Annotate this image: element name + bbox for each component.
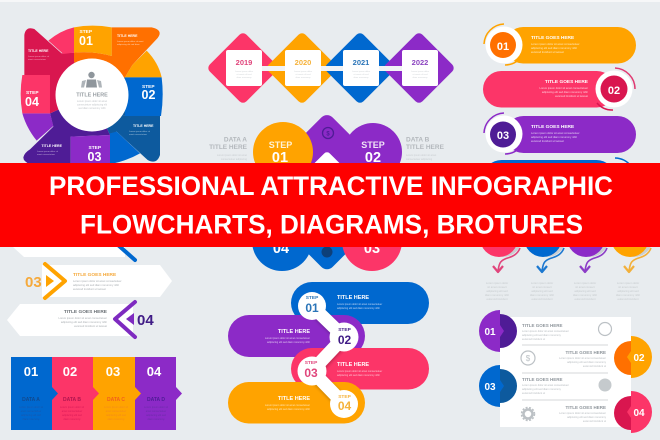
- icon: people: [81, 72, 102, 88]
- column: data b: diam nonummy: [63, 418, 81, 421]
- orange title text: TITLE HERE: [117, 34, 138, 38]
- pill: step 03: Lorem ipsum dolor sit amet consectetuer: [337, 370, 382, 373]
- card: 2019: [226, 50, 262, 86]
- list row 03: Lorem ipsum dolor sit amet consectetuer: [522, 383, 569, 387]
- blue title text: amet consectetuer: [129, 133, 147, 136]
- arrow row: 03: 03: [25, 274, 42, 291]
- captions: Lorem ipsum dolor: [574, 281, 596, 285]
- pill: step 01: adipiscing elit sed diam nonummy nibh: [337, 307, 381, 310]
- list row 04: euismod tincidunt ut: [583, 419, 606, 423]
- pill: step 04: adipiscing elit sed diam nonummy nibh: [267, 408, 311, 411]
- blue title text: Lorem ipsum dolor sit: [129, 130, 150, 133]
- pill: 02: 02: [608, 85, 620, 97]
- pill: 03: adipiscing elit sed diam nonummy nibh: [531, 135, 578, 139]
- arrow row: 03: euismod tincidunt ut laoreet: [73, 287, 106, 291]
- diamond: 2020: [265, 31, 339, 105]
- badge: 03: [479, 365, 517, 407]
- pill: step 03: [291, 348, 429, 390]
- banner: [0, 163, 660, 247]
- column: data d: DATA D: [147, 397, 165, 403]
- pill: 01: TITLE GOES HERE: [531, 35, 575, 41]
- data b label: DATA B: [406, 136, 430, 144]
- step 01 label: 01: [79, 34, 93, 48]
- badge: 04: [614, 391, 652, 433]
- pill: 01: euismod tincidunt ut laoreet: [531, 50, 564, 54]
- card: 2019: 2019: [236, 58, 252, 67]
- captions: [485, 281, 641, 301]
- pill: 01: Lorem ipsum dolor sit amet consectetuer: [531, 42, 580, 46]
- arrow row: 03: [25, 264, 172, 298]
- pill: 03: 03: [497, 130, 509, 142]
- badge: 04: 04: [633, 408, 645, 419]
- card: 2022: [402, 50, 438, 86]
- captions: Lorem ipsum dolor: [617, 281, 639, 285]
- captions: euismod tincidunt: [487, 297, 508, 301]
- white card: [500, 317, 631, 427]
- diamond: 2022: [382, 31, 456, 105]
- circle: step 02: 02: [365, 150, 381, 166]
- pill: step 04: TITLE HERE: [278, 396, 310, 402]
- list row 04: TITLE GOES HERE: [565, 405, 606, 410]
- card: 2022: diam nonummy: [413, 77, 428, 79]
- crimson title text: Lorem ipsum dolor sit: [28, 55, 49, 58]
- blue title text: [129, 124, 154, 136]
- column: data b: 02: [63, 364, 77, 379]
- step 02 label: 02: [142, 88, 155, 102]
- banner headline line 1: PROFESSIONAL ATTRACTIVE INFOGRAPHIC: [49, 171, 613, 201]
- badge: 01: [479, 310, 517, 352]
- pill: step 01: Lorem ipsum dolor sit amet consectetuer: [337, 303, 382, 306]
- connector snake with step numbers: [298, 292, 358, 418]
- pill: 01: [484, 24, 636, 65]
- captions: adipiscing elit sed: [617, 289, 639, 293]
- panel: chevron arrows: [7, 245, 172, 337]
- card: 2021: Lorem ipsum dolor: [352, 70, 370, 73]
- purple title text: [37, 144, 63, 156]
- connector bar: [255, 66, 405, 71]
- captions: diam nonummy nibh: [573, 293, 598, 297]
- data a label: Lorem ipsum dolor sit amet: [217, 154, 247, 157]
- purple title text: amet consectetuer: [37, 153, 55, 156]
- captions: adipiscing elit sed: [486, 289, 508, 293]
- badge: 01: 01: [484, 327, 496, 338]
- circle: step 03: 03: [364, 241, 380, 257]
- connector snake with step numbers: STEP: [305, 360, 318, 366]
- captions: Lorem ipsum dolor: [486, 281, 508, 285]
- circle: step 01: STEP: [269, 140, 292, 150]
- icon: coin: [322, 128, 334, 138]
- center circle: consectetuer adipiscing elit: [77, 104, 107, 106]
- pill: 02: euismod tincidunt ut laoreet: [555, 94, 588, 98]
- column: data a: DATA A: [22, 397, 40, 403]
- column: data b: amet consectetuer: [62, 410, 82, 413]
- badge: 02: 02: [633, 353, 645, 364]
- card: 2022: 2022: [412, 58, 428, 67]
- panel: circles with arrows: [480, 219, 653, 301]
- circle: step 01: 01: [272, 150, 288, 166]
- step 02 label: STEP: [142, 84, 155, 90]
- connector snake with step numbers: 03: [304, 366, 318, 380]
- captions: diam nonummy nibh: [616, 293, 641, 297]
- captions: sit amet consect: [532, 285, 552, 289]
- card: 2020: Lorem ipsum dolor: [294, 70, 312, 73]
- arrow row: 04: adipiscing elit sed diam nonummy nibh: [61, 320, 107, 324]
- list row 01: Lorem ipsum dolor sit amet consectetuer: [522, 329, 569, 333]
- list row 04: [522, 405, 607, 423]
- connector snake with step numbers: 04: [338, 399, 351, 413]
- captions: euismod tincidunt: [532, 297, 553, 301]
- arrow row: 04: euismod tincidunt ut laoreet: [74, 324, 107, 328]
- crimson title text: amet consectetuer: [28, 58, 46, 61]
- captions: euismod tincidunt: [575, 297, 596, 301]
- column: data a: adipiscing elit sed: [21, 414, 41, 417]
- column: data a: Lorem ipsum dolor sit: [19, 406, 43, 409]
- pill: step 04: [228, 382, 365, 424]
- diamond: purple: [289, 112, 365, 188]
- crimson title text: [28, 49, 49, 61]
- panel: data columns: [11, 357, 182, 430]
- step 01 label: STEP: [80, 29, 93, 35]
- card: 2020: sit amet elit sed: [295, 73, 311, 76]
- connector snake with step numbers: 01: [305, 301, 319, 315]
- center circle: [56, 58, 128, 132]
- banner headline line 2: FLOWCHARTS, DIAGRAMS, BROTURES: [80, 210, 583, 240]
- panel: timeline diamonds: [206, 31, 456, 105]
- list row 01: euismod tincidunt ut: [522, 337, 545, 341]
- captions: adipiscing elit sed: [531, 289, 553, 293]
- card: 2020: 2020: [295, 58, 311, 67]
- arrow row: top, blue: [13, 245, 135, 260]
- list row 02: $: [526, 354, 531, 363]
- captions: adipiscing elit sed: [574, 289, 596, 293]
- card: 2022: sit amet elit sed: [412, 73, 428, 76]
- list row 01: [522, 322, 612, 346]
- list row 02: TITLE GOES HERE: [565, 350, 606, 355]
- data a label: consectetuer adipiscing: [221, 158, 248, 161]
- pill: 02: TITLE GOES HERE: [545, 79, 589, 85]
- data b label: TITLE HERE: [406, 144, 445, 151]
- column: data d: amet consectetuer: [146, 410, 166, 413]
- pill: 02: adipiscing elit sed diam nonummy nibh: [542, 90, 588, 94]
- step 03 label: 03: [88, 150, 101, 164]
- list row 02: adipiscing elit sed diam nonummy: [567, 360, 607, 364]
- pill: 02: Lorem ipsum dolor sit amet consectetuer: [539, 86, 588, 90]
- captions: sit amet consect: [575, 285, 595, 289]
- pill: 02: [483, 68, 635, 110]
- pill: 03: [484, 113, 636, 154]
- arrow row: 04: Lorem ipsum dolor sit amet consectetuer: [58, 316, 107, 320]
- list row 04: adipiscing elit sed diam nonummy: [567, 415, 607, 419]
- crimson title text: TITLE HERE: [28, 49, 49, 53]
- column: data c: amet consectetuer: [106, 410, 126, 413]
- badge: 03: 03: [484, 382, 496, 393]
- data a label: DATA A: [224, 136, 247, 144]
- list row 02: Lorem ipsum dolor sit amet consectetuer: [559, 356, 606, 360]
- data b label: Lorem ipsum dolor sit amet: [406, 154, 436, 157]
- pill: 01: 01: [497, 41, 509, 53]
- connector snake with step numbers: 02: [338, 333, 351, 347]
- diagram segments: [21, 26, 163, 164]
- list row 02: euismod tincidunt ut: [583, 364, 606, 368]
- list row 03: TITLE GOES HERE: [522, 377, 563, 382]
- white center diamond: [309, 151, 345, 187]
- arrow row: 04: [7, 302, 154, 337]
- captions: Lorem ipsum dolor: [531, 281, 553, 285]
- card: 2019: sit amet elit sed: [236, 73, 252, 76]
- list row 01: TITLE GOES HERE: [522, 323, 563, 328]
- purple title text: TITLE HERE: [42, 144, 63, 148]
- pill: step 03: TITLE HERE: [337, 362, 369, 368]
- arrow row: 03: Lorem ipsum dolor sit amet consectetuer: [73, 279, 122, 283]
- item: orange arrow: [611, 219, 653, 272]
- orange title text: adipiscing elit sed diam: [117, 43, 140, 46]
- connector snake with step numbers: STEP: [306, 295, 319, 301]
- circle: step 04: [252, 211, 312, 271]
- arrow row: 03: adipiscing elit sed diam nonummy nibh: [73, 283, 120, 287]
- step 04 label: 04: [25, 95, 39, 109]
- column: data c: Lorem ipsum dolor sit: [104, 406, 128, 409]
- captions: sit amet consect: [618, 285, 638, 289]
- column: data c: 03: [106, 364, 120, 379]
- column: data c: diam nonummy: [107, 418, 125, 421]
- card: 2021: sit amet elit sed: [353, 73, 369, 76]
- column: data d: diam nonummy: [147, 418, 165, 421]
- circle: step 04: 04: [273, 241, 289, 257]
- card: 2022: Lorem ipsum dolor: [411, 70, 429, 73]
- pill: 03: Lorem ipsum dolor sit amet consectetuer: [531, 131, 580, 135]
- blue title text: TITLE HERE: [133, 124, 154, 128]
- circle: step 03: [342, 211, 402, 271]
- circle: step 02: [344, 123, 402, 181]
- arrow row: 04: TITLE GOES HERE: [64, 309, 108, 315]
- column: data d: Lorem ipsum dolor sit: [144, 406, 168, 409]
- list row 02: [521, 350, 608, 374]
- card: 2021: diam nonummy: [354, 77, 369, 79]
- column: data c: [93, 357, 141, 430]
- column: data c: adipiscing elit sed: [106, 414, 126, 417]
- column: data b: Lorem ipsum dolor sit: [60, 406, 84, 409]
- column: data a: diam nonummy: [22, 418, 40, 421]
- diamond: blue: [294, 207, 360, 273]
- column: data d: adipiscing elit sed: [146, 414, 166, 417]
- pill: step 01: [291, 282, 429, 324]
- panel: snake step pills: [228, 282, 429, 424]
- list row 04: Lorem ipsum dolor sit amet consectetuer: [559, 411, 606, 415]
- connector snake with step numbers: STEP: [338, 327, 352, 333]
- diamond: 2021: [323, 31, 397, 105]
- column: data b: DATA B: [63, 397, 81, 403]
- circle: step 01: [253, 122, 313, 182]
- pill: step 03: adipiscing elit sed diam nonummy nibh: [337, 374, 381, 377]
- data a label: TITLE HERE: [209, 144, 248, 151]
- orange title text: [117, 34, 144, 46]
- panel: four step circles: [209, 112, 445, 273]
- pill: step 01: TITLE HERE: [337, 295, 369, 301]
- center circle: TITLE HERE: [76, 92, 108, 98]
- panel: white list with side badges: [479, 310, 652, 433]
- list row 03: euismod tincidunt ut: [522, 391, 545, 395]
- column: data c: DATA C: [107, 397, 125, 403]
- pill: step 02: [228, 315, 365, 357]
- card: 2019: Lorem ipsum dolor: [235, 70, 253, 73]
- column: data d: [135, 357, 182, 430]
- center circle: Lorem ipsum dolor sit amet: [77, 100, 107, 103]
- captions: diam nonummy nibh: [530, 293, 555, 297]
- badge: 02: [614, 336, 652, 378]
- pill: step 02: adipiscing elit sed diam nonummy nibh: [267, 341, 311, 344]
- list row 03: adipiscing elit sed diam nonummy: [522, 387, 562, 391]
- column: data b: [52, 357, 99, 430]
- column: data a: [11, 357, 58, 430]
- list row 03: [522, 377, 612, 400]
- card: 2020: diam nonummy: [296, 77, 311, 79]
- center circle: sed diam nonummy nibh: [78, 107, 106, 110]
- icon: coin: $: [326, 132, 330, 138]
- pill: step 04: Lorem ipsum dolor sit amet consectetuer: [265, 404, 310, 407]
- icon: dark dot: [322, 246, 332, 258]
- orange title text: Lorem ipsum dolor sit amet: [117, 40, 144, 43]
- purple title text: Lorem ipsum dolor sit: [37, 150, 58, 153]
- item: pink arrow: [480, 219, 522, 272]
- card: 2019: diam nonummy: [237, 77, 252, 79]
- data b label: [406, 136, 445, 161]
- card: 2021: 2021: [353, 58, 369, 67]
- connector snake with step numbers: STEP: [338, 394, 352, 400]
- step 03 label: STEP: [88, 145, 102, 151]
- diamond: 2019: [206, 31, 280, 105]
- pill: 03: euismod tincidunt ut laoreet: [531, 139, 564, 143]
- circle: step 02: STEP: [361, 140, 385, 150]
- captions: sit amet consect: [487, 285, 507, 289]
- panel: numbered pills: [483, 24, 636, 197]
- data b label: consectetuer adipiscing: [406, 158, 433, 161]
- column: data a: amet consectetuer: [21, 410, 41, 413]
- item: purple arrow: [567, 219, 609, 272]
- card: 2021: [343, 50, 379, 86]
- captions: euismod tincidunt: [618, 297, 639, 301]
- card: 2020: [285, 50, 321, 86]
- pill: 03: TITLE GOES HERE: [531, 124, 575, 130]
- arrow row: 03: TITLE GOES HERE: [73, 272, 117, 278]
- column: data d: 04: [147, 364, 162, 379]
- data a label: [209, 136, 248, 161]
- pill: 01: adipiscing elit sed diam nonummy nibh: [531, 46, 578, 50]
- column: data a: 01: [24, 364, 38, 379]
- pill: step 02: TITLE HERE: [278, 329, 310, 335]
- arrow row: 04: 04: [137, 312, 154, 329]
- panel: circular four step diagram: [21, 26, 163, 164]
- column: data b: adipiscing elit sed: [62, 414, 82, 417]
- item: blue arrow: [524, 219, 566, 272]
- list row 01: adipiscing elit sed diam nonummy: [522, 333, 562, 337]
- step 04 label: STEP: [26, 90, 39, 96]
- pill: step 02: Lorem ipsum dolor sit amet consectetuer: [265, 337, 310, 340]
- pill: 04: [483, 158, 631, 197]
- captions: diam nonummy nibh: [485, 293, 510, 297]
